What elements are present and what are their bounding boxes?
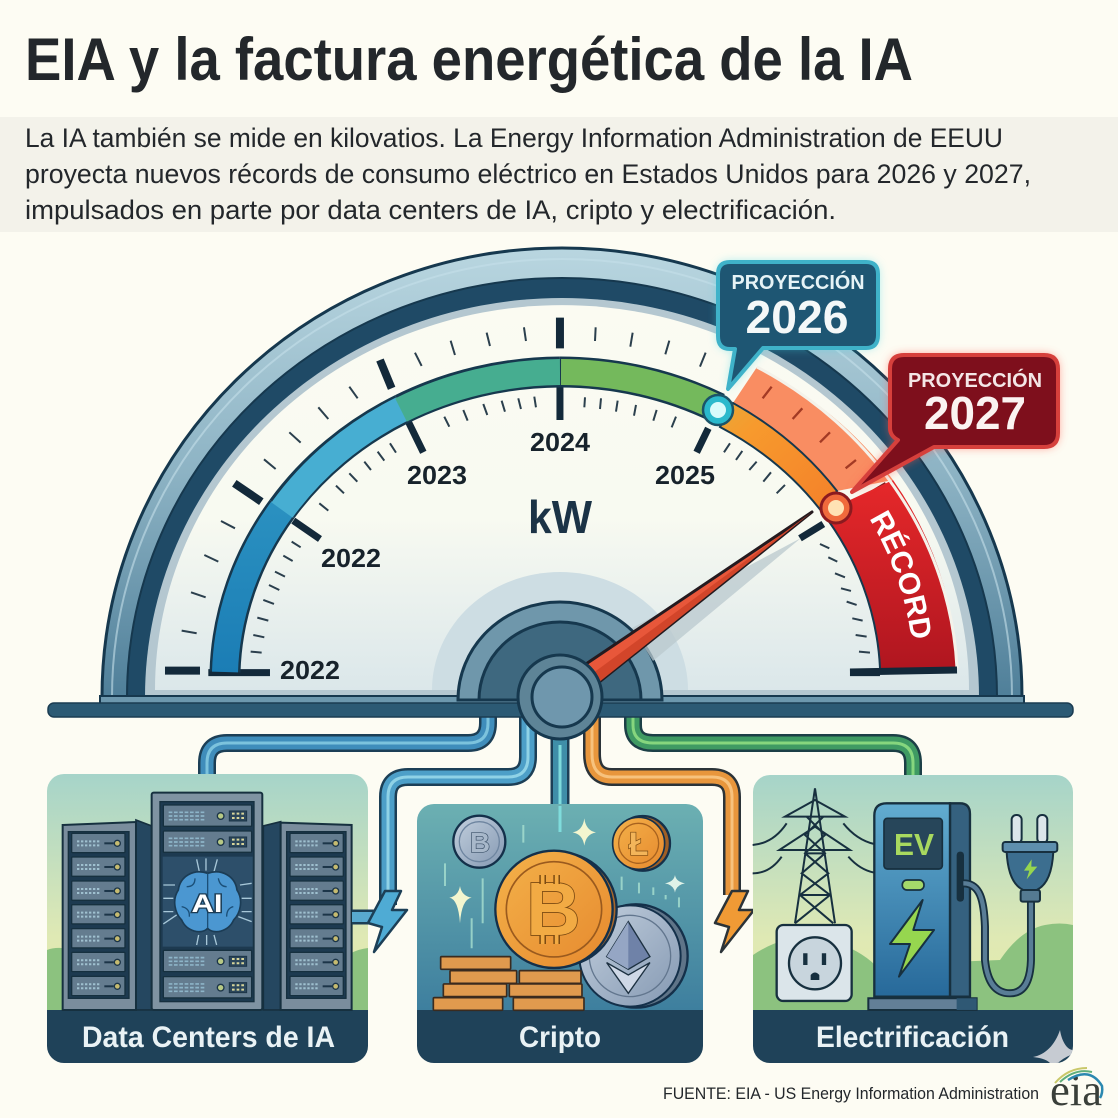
coin: small bitcoin xyxy=(453,816,505,868)
record label: RÉCORD xyxy=(870,510,930,638)
red band base line xyxy=(850,670,957,672)
title: EIA y la factura energética de la IA xyxy=(25,26,913,93)
panel: crypto xyxy=(417,804,703,1063)
coin: ethereum xyxy=(579,904,688,1008)
panel label: Cripto xyxy=(519,1021,601,1054)
callout: proyección 2027: 2027 xyxy=(924,387,1026,439)
arc segment: 2022-2023 light blue xyxy=(282,409,402,509)
hub center cap xyxy=(518,655,602,739)
icon: EV charger xyxy=(868,803,977,1010)
icon: orange lightning bolt xyxy=(715,891,754,952)
coin: big bitcoin xyxy=(495,851,617,968)
coin: litecoin xyxy=(613,816,670,871)
marker: 2026 xyxy=(703,395,733,425)
panel: data centers xyxy=(47,774,368,1063)
arc segment: 2024-2025 green xyxy=(560,372,718,408)
arc segment: orange xyxy=(720,403,837,512)
icon: blue lightning bolt xyxy=(368,891,407,952)
pipe: crypto teal xyxy=(550,725,570,832)
gauge housing rings xyxy=(102,248,1022,697)
callout: proyección 2027 xyxy=(852,355,1058,492)
intro text block xyxy=(0,117,1118,232)
icon: AI brain xyxy=(175,872,241,932)
coin stacks xyxy=(433,957,584,1010)
intro text block: La IA también se mide en kilovatios. La Energy Information Administration de EEUU xyxy=(25,123,1003,153)
white edge of record band xyxy=(757,367,957,668)
outer minor ticks left xyxy=(165,318,560,673)
panel label: Data Centers de IA xyxy=(82,1021,335,1054)
sparkles xyxy=(445,818,685,948)
base bar xyxy=(48,696,1073,717)
year labels: 2024 xyxy=(530,427,591,457)
icon: power outlet xyxy=(777,925,852,1001)
arc segment: 2023-2024 teal green xyxy=(402,372,560,409)
intro text block: impulsados en parte por data centers de IA, cripto y electrificación. xyxy=(25,195,836,225)
pipe: orange xyxy=(592,712,732,895)
icon: transmission tower xyxy=(753,788,874,923)
pipe: secondary blue xyxy=(388,712,528,905)
hub rings xyxy=(458,602,662,700)
year labels xyxy=(280,427,715,685)
callout: proyección 2026 xyxy=(718,262,878,389)
outer minor ticks right xyxy=(584,327,880,673)
panel: electrification xyxy=(753,775,1073,1063)
icon: plug and cable xyxy=(963,815,1057,993)
kW unit: kW xyxy=(528,491,593,543)
peach band ticks xyxy=(763,387,887,502)
year labels: 2022 xyxy=(321,543,381,573)
arc segment: 2022 dark blue xyxy=(225,509,282,672)
coin: small bitcoin: B xyxy=(470,827,490,858)
arc segment: red record xyxy=(825,480,957,668)
gauge needle shadow xyxy=(632,538,801,661)
coin: litecoin: Ł xyxy=(629,826,648,862)
source text: FUENTE: EIA - US Energy Information Administration xyxy=(663,1084,1039,1103)
panel: gauge xyxy=(47,246,1074,740)
brain label: AI xyxy=(192,890,222,918)
panel label: Electrificación xyxy=(816,1021,1009,1054)
year labels: 2025 xyxy=(655,460,715,490)
coin: big bitcoin: B xyxy=(526,867,580,951)
logo: eia: eia xyxy=(1050,1066,1102,1115)
year labels: 2023 xyxy=(407,460,467,490)
server racks xyxy=(63,793,352,1010)
arc segment: peach projection band xyxy=(733,367,893,491)
callout: proyección 2026: 2026 xyxy=(746,291,848,343)
connector stub: rack to bolt xyxy=(352,910,378,924)
intro text block: proyecta nuevos récords de consumo eléctrico en Estados Unidos para 2026 y 2027, xyxy=(25,159,1031,189)
marker: 2027 xyxy=(821,493,851,523)
callout: proyección 2027: PROYECCIÓN xyxy=(908,368,1042,392)
pipe: green xyxy=(633,712,913,800)
callout: proyección 2026: PROYECCIÓN xyxy=(732,270,864,294)
pipe: data centers blue xyxy=(207,712,488,800)
year labels: 2022 xyxy=(280,655,340,685)
EV screen label: EV xyxy=(894,827,934,862)
hub halo xyxy=(432,572,688,690)
gauge needle xyxy=(577,512,812,687)
